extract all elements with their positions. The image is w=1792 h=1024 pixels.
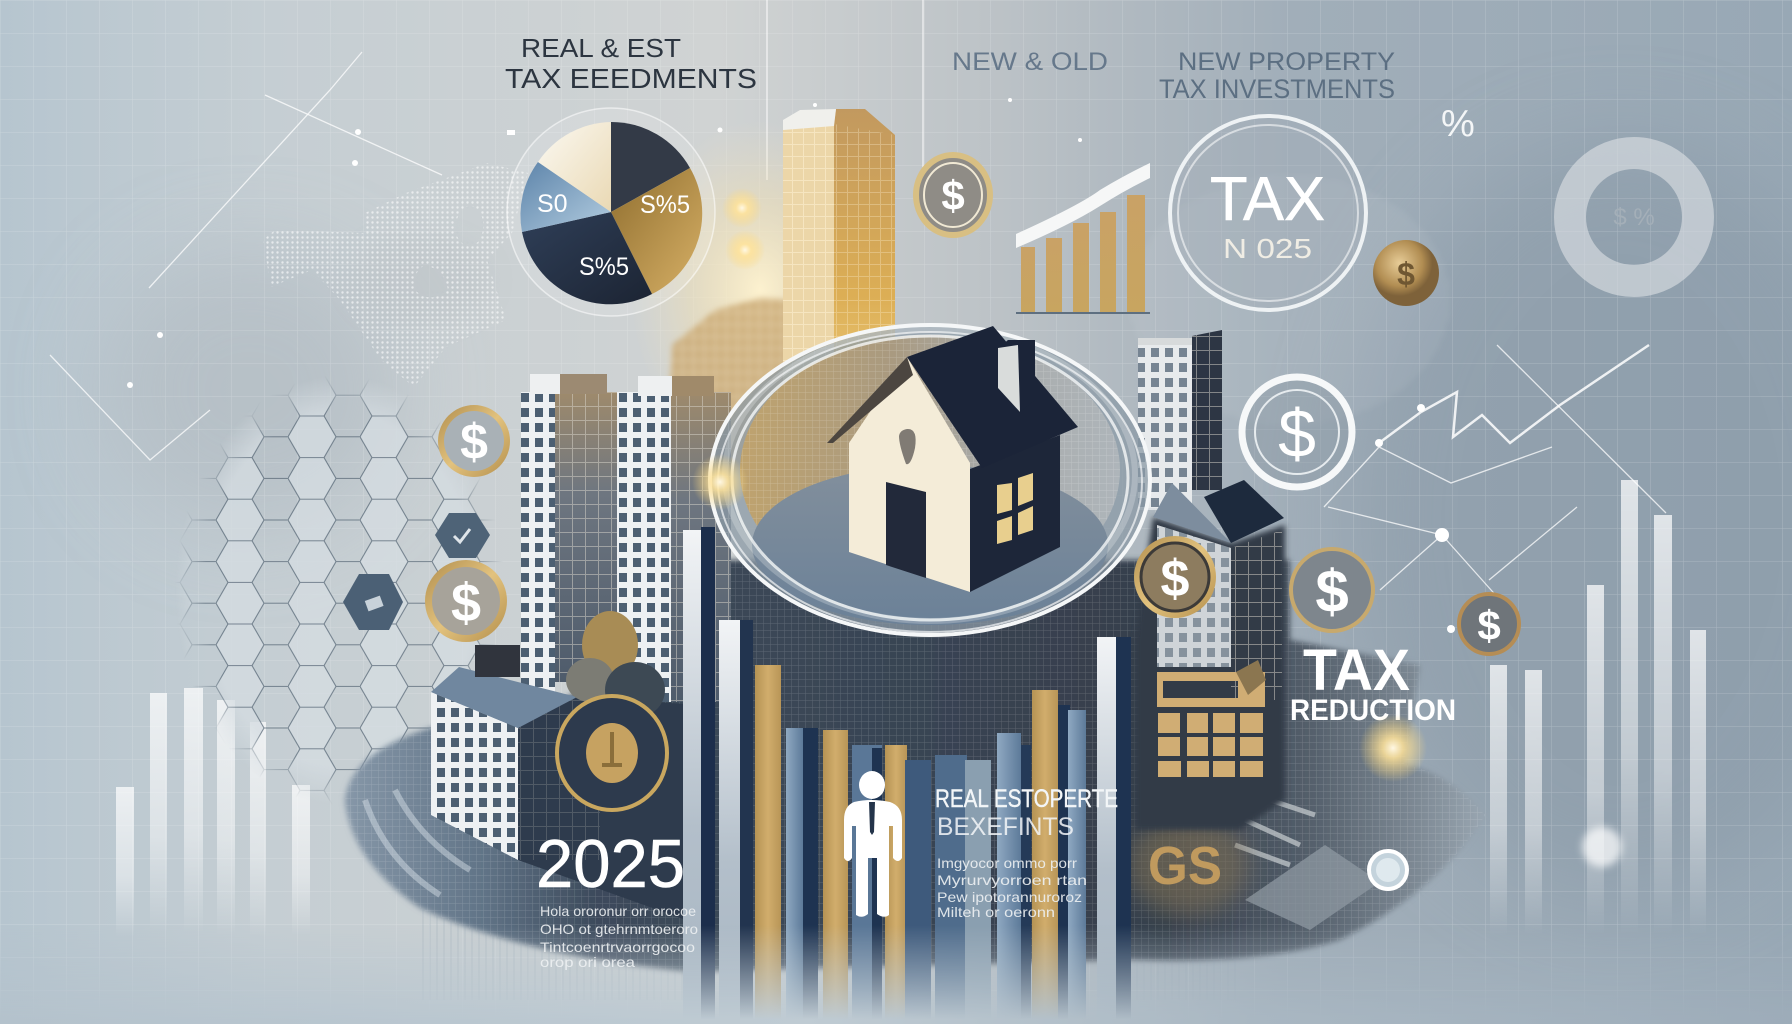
heading: property tax investments: NEW PROPERTY [1178, 48, 1395, 76]
top light orbs [722, 188, 765, 270]
heading: new and old: NEW & OLD [952, 48, 1108, 76]
benefits description text: Pew ipotorannuroroz [937, 889, 1082, 905]
person icon [844, 771, 902, 917]
coin: top center: $ [941, 172, 965, 219]
slice cream [538, 122, 611, 212]
real estate benefits heading: BEXEFINTS [937, 813, 1074, 841]
tax 2025 badge [1170, 116, 1366, 310]
left description text: Tintcoenrtrvaorrgocoo [540, 939, 695, 955]
hexagon honeycomb [175, 375, 505, 805]
left roof edge [827, 357, 913, 443]
center vertical bars [683, 527, 1131, 1024]
drips under plinth [420, 908, 1240, 1000]
trend lines and sparkles [50, 0, 1666, 720]
twin towers left [521, 374, 731, 702]
percent symbol: % [1441, 103, 1475, 145]
pie chart [507, 108, 715, 316]
benefits description text: Milteh or oeronn [937, 904, 1055, 920]
real estate benefits heading: REAL ESTOPERTE [935, 785, 1118, 813]
golden back building [667, 298, 810, 470]
slice gold [611, 168, 702, 294]
coin: dollar far right: $ [1477, 602, 1501, 649]
coin: dollar far right [1459, 594, 1519, 654]
glow lower right [1582, 827, 1622, 867]
left description text: orop ori orea [540, 954, 635, 970]
benefits description text: Imgyocor ommo porr [937, 855, 1077, 871]
tax reduction label: TAX [1303, 638, 1410, 703]
pie labels: S%5 [640, 191, 690, 219]
coin: ringed dollar right: $ [1278, 396, 1316, 472]
coin: dollar mid right: $ [1315, 558, 1349, 625]
coin: dollar on building: $ [1161, 550, 1190, 608]
benefits description text [937, 855, 1087, 920]
glow left of ring [692, 454, 748, 510]
coin: dollar left upper [438, 405, 510, 477]
heading: real estate tax [505, 33, 757, 94]
tax reduction label [1290, 638, 1456, 727]
left description text: Hola ororonur orr orocoe [540, 903, 696, 919]
golden light haze [630, 120, 890, 460]
tax 2025 badge: TAX [1210, 165, 1325, 234]
highlighted hexagons [343, 513, 490, 630]
small dial icon [1369, 851, 1407, 889]
calculator icon [1157, 660, 1266, 777]
slice dark [611, 122, 690, 212]
house front wall [849, 357, 970, 592]
rising bar chart [1016, 163, 1150, 313]
house icon [827, 326, 1078, 592]
keyhole vent [899, 429, 916, 464]
left background bar chart [116, 688, 310, 937]
house roof [907, 326, 1078, 468]
gold coin ball [1373, 240, 1439, 306]
heading: property tax investments: TAX INVESTMENTS [1159, 74, 1395, 104]
tower right of house [1138, 330, 1222, 510]
coin: dollar left lower: $ [451, 573, 481, 633]
coin: dollar on building [1134, 536, 1216, 618]
house side wall [970, 435, 1060, 592]
emblem coin [557, 696, 667, 810]
tax 2025 badge: N 025 [1223, 233, 1312, 264]
tax reduction label: REDUCTION [1290, 694, 1456, 727]
coin: top center [916, 155, 990, 235]
door [886, 482, 926, 578]
office building lower left [431, 645, 700, 925]
dark city plinth [345, 560, 1485, 972]
right background bar chart [1490, 480, 1706, 935]
year label 2025: 2025 [536, 826, 685, 902]
chimney [998, 340, 1035, 412]
donut chart: $ % [1613, 204, 1655, 231]
house ring platform [710, 325, 1150, 635]
real estate benefits heading [935, 785, 1118, 841]
heading: property tax investments [1159, 48, 1395, 104]
bottom fade [0, 925, 1792, 1024]
pie labels: S%5 [579, 253, 629, 281]
slice blue [520, 162, 611, 232]
dotted texture behind tax badge [1130, 175, 1450, 425]
gold coin ball: $ [1397, 256, 1415, 292]
gold GS coin: GS [1148, 836, 1222, 896]
slice navy [522, 212, 652, 304]
glow right of city [1359, 714, 1427, 782]
left description text: OHO ot gtehrnmtoeroro [540, 921, 698, 937]
world map ghost [263, 163, 528, 387]
coin: dollar mid right [1291, 549, 1373, 631]
pie labels: S0 [537, 190, 568, 218]
pie labels [537, 190, 690, 281]
heading: real estate tax: REAL & EST [521, 33, 681, 63]
coin: dollar left lower [425, 560, 507, 642]
coin: ringed dollar right [1242, 377, 1352, 487]
window [997, 473, 1033, 544]
heading: real estate tax: TAX EEEDMENTS [505, 63, 757, 94]
benefits description text: Myrurvyorroen rtan [937, 872, 1087, 888]
golden shrub [566, 611, 665, 718]
coin: dollar left upper: $ [460, 414, 488, 470]
slate roofed building right [1135, 480, 1285, 830]
gold skyscraper [783, 109, 895, 420]
left description text [540, 903, 698, 970]
donut chart [1570, 153, 1698, 281]
